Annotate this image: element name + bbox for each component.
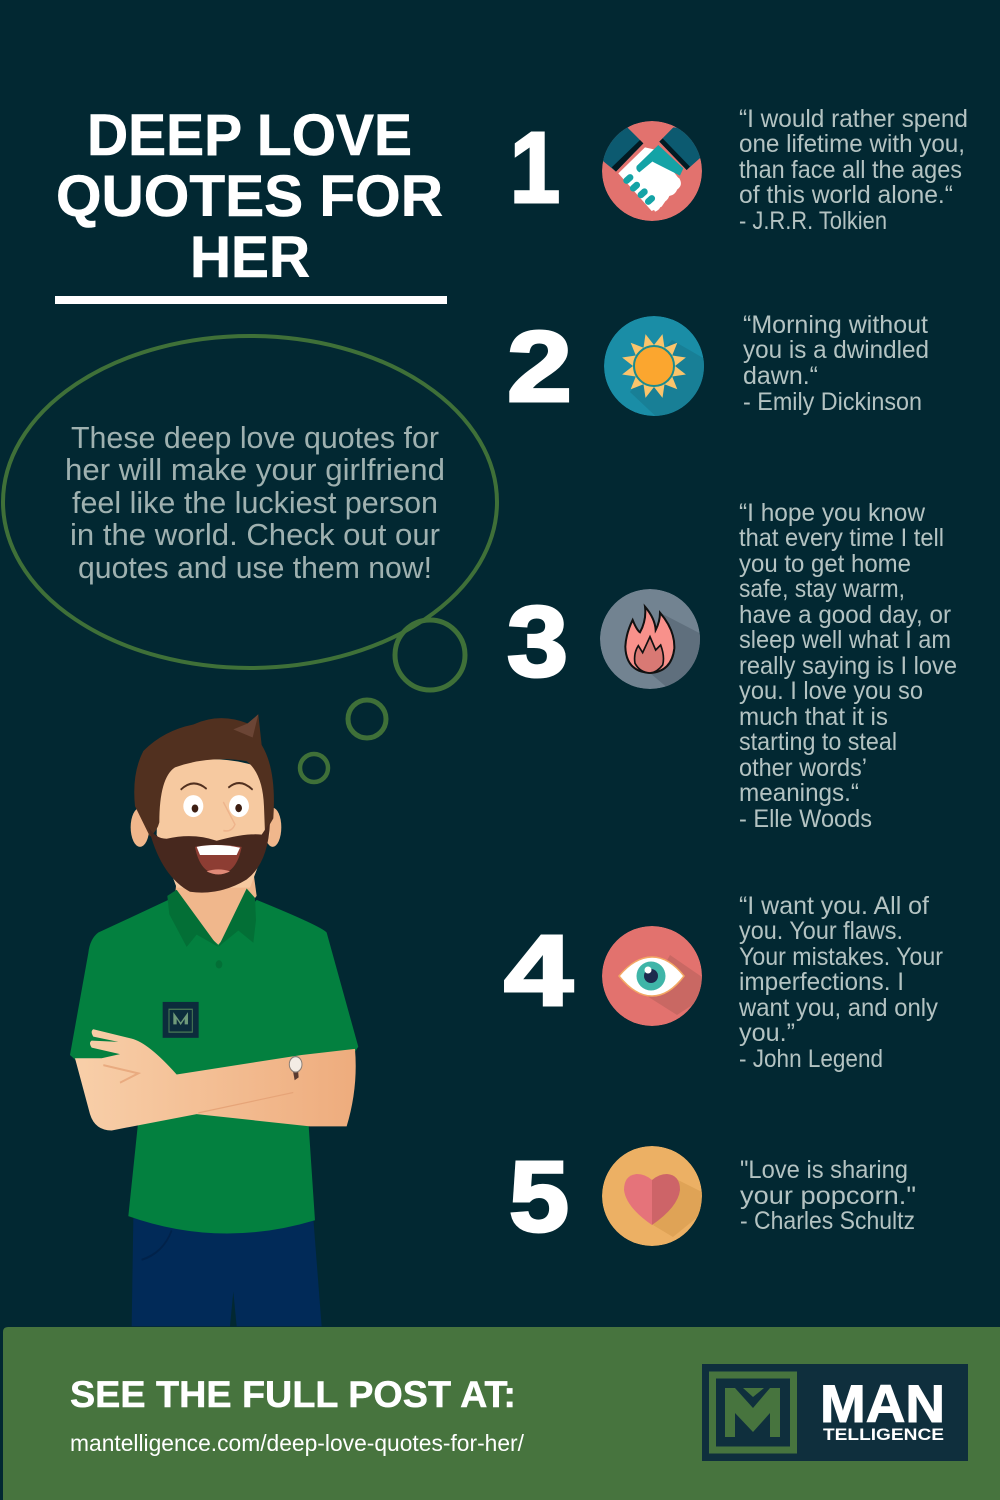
quote 3: “I hope you know: [739, 499, 926, 527]
quote 3: sleep well what I am: [739, 626, 951, 654]
quote 3: you to get home: [739, 550, 911, 578]
quote 2: [743, 311, 929, 416]
quote 3: - Elle Woods: [739, 805, 872, 833]
quote 4: you.”: [739, 1019, 795, 1047]
icon: heart: [602, 1146, 702, 1246]
footer heading: SEE THE FULL POST AT:: [70, 1374, 516, 1415]
quote 5: [740, 1156, 916, 1235]
quote 5: your popcorn.": [740, 1182, 916, 1210]
icon: sun: [604, 316, 704, 416]
quote 3: meanings.“: [739, 779, 859, 807]
quote 5: "Love is sharing: [740, 1156, 908, 1184]
quote 3: other words’: [739, 754, 867, 782]
neck: [175, 871, 257, 947]
quote 3: really saying is I love: [739, 652, 957, 680]
numbers: 2: [507, 311, 572, 423]
polo shirt: [70, 888, 358, 1234]
logo: [702, 1364, 968, 1461]
quote 2: “Morning without: [743, 311, 928, 339]
icon: eye: [602, 926, 702, 1026]
intro paragraph: her will make your girlfriend: [65, 452, 445, 487]
quote 5: - Charles Schultz: [740, 1207, 915, 1235]
quote 4: - John Legend: [739, 1045, 883, 1073]
crossed arms: [75, 1029, 356, 1130]
numbers: 1: [510, 112, 560, 224]
intro paragraph: in the world. Check out our: [70, 517, 440, 552]
quote 1: than face all the ages: [739, 156, 962, 184]
numbers: 4: [504, 915, 573, 1027]
title: QUOTES FOR: [56, 164, 443, 229]
quote 2: you is a dwindled: [743, 336, 929, 364]
logo: TELLIGENCE: [823, 1426, 944, 1444]
numbers: 5: [509, 1141, 569, 1253]
beard: [148, 822, 270, 893]
intro paragraph: quotes and use them now!: [78, 550, 432, 585]
footer band: [3, 1327, 1000, 1500]
eyes: [181, 783, 253, 831]
quote 1: - J.R.R. Tolkien: [739, 207, 887, 235]
quote 2: - Emily Dickinson: [743, 388, 922, 416]
quote 1: of this world alone.“: [739, 181, 953, 209]
title: [56, 103, 443, 290]
quote 3: that every time I tell: [739, 524, 944, 552]
quote 1: “I would rather spend: [739, 105, 968, 133]
hair: [134, 714, 274, 837]
quote 3: starting to steal: [739, 728, 897, 756]
numbers: [504, 112, 573, 1253]
quote 4: you. Your flaws.: [739, 917, 903, 945]
footer url: mantelligence.com/deep-love-quotes-for-her/: [70, 1430, 525, 1456]
quote 4: “I want you. All of: [739, 892, 929, 920]
quote 4: Your mistakes. Your: [739, 943, 943, 971]
title: DEEP LOVE: [87, 103, 412, 168]
quote 3: much that it is: [739, 703, 888, 731]
quote 2: dawn.“: [743, 362, 818, 390]
mouth: [195, 845, 242, 875]
character: man in green polo: [70, 714, 358, 1326]
title underline: [55, 296, 447, 304]
quote 1: [739, 105, 968, 235]
quote 3: you. I love you so: [739, 677, 923, 705]
face: [157, 759, 270, 888]
quote 3: safe, stay warm,: [739, 575, 905, 603]
quote 1: one lifetime with you,: [739, 130, 965, 158]
shirt badge: [163, 1002, 199, 1038]
quote 4: want you, and only: [738, 994, 938, 1022]
icon: flame: [600, 589, 702, 690]
icon: handshake: [600, 121, 702, 221]
intro paragraph: feel like the luckiest person: [72, 485, 438, 520]
intro paragraph: [65, 420, 445, 585]
quote 4: [738, 892, 943, 1073]
thought bubble: [3, 336, 497, 782]
quote 3: have a good day, or: [739, 601, 951, 629]
logo: MAN: [820, 1375, 945, 1434]
trousers: [132, 1218, 322, 1326]
numbers: 3: [507, 586, 568, 698]
ears: [131, 808, 281, 847]
wrist watch: [289, 1057, 302, 1080]
intro paragraph: These deep love quotes for: [71, 420, 439, 455]
title: HER: [190, 225, 310, 290]
quote 4: imperfections. I: [739, 968, 904, 996]
quote 3: [739, 499, 957, 833]
